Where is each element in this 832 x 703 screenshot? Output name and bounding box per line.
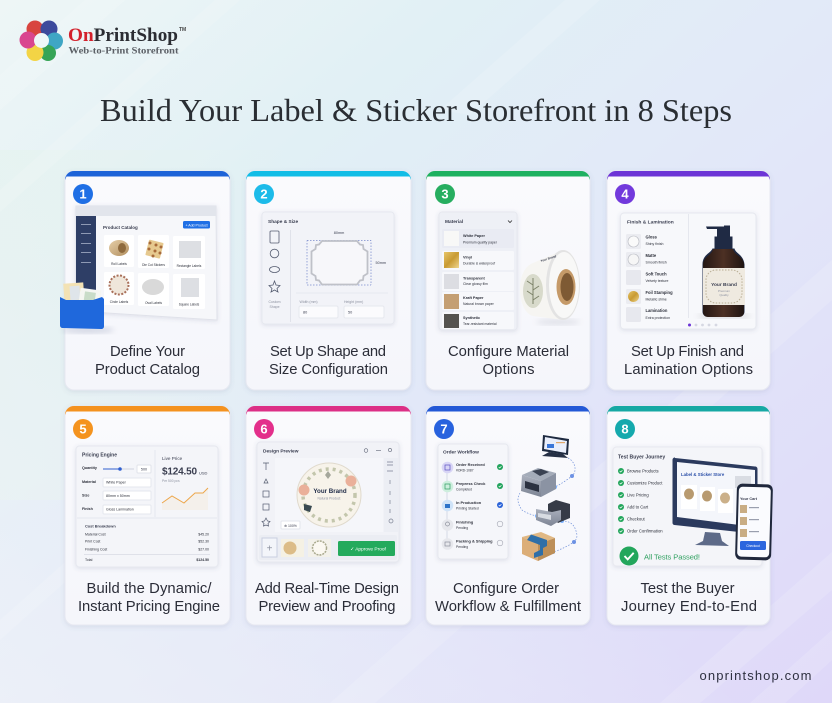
product tiles [104, 235, 205, 309]
finish panel: Metallic shine [646, 298, 667, 302]
card background [607, 406, 770, 625]
card accent bar [426, 171, 590, 180]
finish panel: Matte [646, 253, 657, 258]
step number badge: 4 [621, 186, 629, 202]
caption [435, 581, 581, 615]
blue folder icon [60, 282, 114, 334]
material list: Durable & waterproof [463, 262, 495, 266]
pricing form: Size [82, 494, 89, 498]
logo tagline: Web-to-Print Storefront [68, 46, 179, 56]
caption [269, 344, 388, 378]
buyer journey panel: Test Buyer Journey [618, 454, 665, 460]
product tiles: Roll Labels [111, 262, 127, 266]
shape and size panel [262, 212, 394, 324]
cost breakdown [84, 524, 210, 562]
catalog browser window [76, 206, 217, 320]
checklist: Customize Product [627, 480, 663, 486]
pump bottle: Quality [719, 293, 729, 297]
step number badge [435, 184, 455, 204]
step number badge [254, 419, 274, 439]
caption [255, 581, 399, 615]
pricing form: Material [82, 480, 96, 484]
finish panel: Gloss [646, 234, 658, 240]
card accent bar [607, 171, 770, 180]
label outline with dimensions: 80mm [334, 231, 344, 235]
fulfillment devices flow [518, 435, 577, 561]
order workflow panel: #ORD-1087 [456, 468, 474, 472]
live price: Live Price [162, 456, 183, 461]
live price: Per 500 pcs [162, 479, 180, 483]
shape and size panel: Custom [268, 300, 281, 304]
card accent bar [65, 406, 230, 415]
finish panel: Extra protection [646, 316, 670, 320]
material list: Tear-resistant material [463, 322, 497, 326]
cost breakdown: $45.20 [198, 532, 209, 536]
step number badge [73, 419, 93, 439]
width and height inputs: Height (mm) [344, 300, 363, 304]
panel: step 1 define product catalog [60, 171, 230, 390]
zoom percent [281, 521, 300, 529]
logo wordmark: OnPrintShop [68, 26, 178, 46]
step number badge: 7 [440, 422, 448, 436]
design preview panel [257, 442, 399, 562]
panel: step 6 design preview [246, 406, 411, 625]
material list: Vinyl [463, 256, 472, 260]
pricing form: White Paper [106, 480, 127, 484]
caption [621, 581, 757, 615]
product tiles: Rectangle Labels [177, 264, 202, 268]
order workflow panel: Printing Started [456, 506, 479, 510]
cost breakdown: Total [85, 558, 93, 562]
pump bottle: Your Brand [711, 282, 737, 288]
material list [439, 212, 517, 330]
panel: step 4 finish and lamination [607, 171, 770, 390]
approve proof button [338, 541, 395, 556]
caption: Configure Order [453, 581, 559, 597]
caption [624, 344, 753, 378]
order workflow panel: Packing & Shipping [456, 538, 493, 544]
panel: step 5 pricing engine [65, 406, 230, 625]
caption: Size Configuration [269, 362, 388, 378]
order workflow panel: Order Received [456, 462, 485, 467]
pricing panel [76, 446, 218, 567]
caption: Lamination Options [624, 362, 753, 378]
material list: Kraft Paper [463, 296, 484, 300]
checklist: Order Confirmation [627, 528, 663, 534]
material list: Clear glossy film [463, 282, 488, 286]
step number badge: 2 [260, 186, 268, 202]
round label preview: Your Brand [313, 488, 347, 495]
checklist: Checkout [627, 516, 646, 522]
shape and size panel: Shape [269, 305, 280, 309]
checklist [618, 468, 663, 534]
step number badge: 6 [260, 422, 268, 436]
pump bottle [697, 226, 751, 318]
product tiles: Square Labels [179, 302, 200, 306]
cost breakdown: Material Cost [85, 532, 106, 536]
pump bottle: Premium [718, 289, 730, 293]
status marks [497, 464, 503, 546]
caption: Journey End-to-End [621, 599, 757, 615]
finish panel: Velvety texture [646, 279, 669, 283]
card background [607, 171, 770, 390]
material list: Synthetic [463, 316, 480, 320]
pricing form: Gloss Lamination [106, 508, 134, 512]
label outline with dimensions: 50mm [376, 261, 386, 265]
live price: $124.50 [162, 466, 197, 478]
card accent bar [246, 406, 411, 415]
large printer [521, 468, 556, 497]
card accent bar [607, 406, 770, 415]
cost breakdown: Finishing Cost [85, 548, 107, 552]
website url: onprintshop.com [700, 668, 812, 683]
card background [65, 171, 230, 390]
caption: Configure Material [448, 344, 569, 360]
smartphone [735, 484, 773, 560]
logo flower mark [20, 20, 63, 61]
live price [162, 456, 208, 510]
live price: USD [199, 470, 208, 476]
proof strip: + [267, 544, 273, 554]
shape selector icons [269, 231, 280, 292]
finish panel: Smooth finish [646, 260, 667, 264]
width and height inputs: Width (mm) [300, 300, 318, 304]
checklist: Live Pricing [627, 492, 649, 498]
caption: Options [482, 362, 534, 378]
order workflow panel: Pending [456, 526, 468, 530]
caption: Build the Dynamic/ [86, 581, 212, 597]
material list: Material [445, 219, 463, 225]
order workflow panel: Finishing [456, 520, 474, 524]
cost breakdown: Cost Breakdown [85, 524, 116, 528]
caption: Set Up Finish and [631, 344, 744, 360]
catalog browser window: Product Catalog [103, 225, 138, 230]
order workflow panel: Prepress Check [456, 481, 486, 486]
width and height inputs [299, 300, 384, 318]
buyer journey panel [613, 447, 773, 566]
logo trademark: TM [179, 27, 186, 33]
desktop monitor [672, 458, 758, 546]
step number badge: 8 [621, 422, 629, 436]
caption [448, 344, 569, 378]
tests passed badge: All Tests Passed! [644, 552, 700, 562]
carousel dots [688, 324, 717, 326]
card background [426, 171, 590, 390]
step number badge [73, 184, 93, 204]
desktop monitor: Label & Sticker Store [681, 472, 725, 477]
smartphone: Checkout [746, 544, 760, 548]
panel: step 8 buyer journey [607, 406, 773, 625]
finish panel: Lamination [646, 308, 668, 313]
finish option swatches [626, 234, 641, 322]
card background [65, 406, 230, 625]
step number badge [434, 419, 454, 439]
width and height inputs: 50 [348, 310, 352, 314]
finish panel: Soft Touch [646, 272, 667, 276]
smartphone: Your Cart [740, 497, 758, 501]
step number badge: 1 [79, 186, 87, 202]
step number badge [254, 184, 274, 204]
pricing form: 500 [141, 468, 147, 472]
proof strip [259, 535, 397, 560]
product tiles: Die Cut Stickers [142, 263, 165, 267]
cost breakdown: $52.30 [198, 540, 209, 544]
design preview panel: Design Preview [263, 448, 299, 454]
step number badge [615, 419, 635, 439]
card accent bar [65, 171, 230, 180]
product tiles: Oval Labels [145, 301, 162, 305]
round label preview: Natural Product [318, 496, 341, 500]
pricing form: 80mm x 50mm [106, 494, 130, 498]
order workflow panel: Pending [456, 545, 468, 549]
caption: Preview and Proofing [258, 599, 396, 615]
pricing form [82, 465, 151, 514]
cost breakdown: $27.00 [198, 548, 209, 552]
connector lines [518, 458, 577, 552]
step number badge: 3 [441, 186, 449, 202]
order workflow panel: Completed [456, 488, 472, 492]
caption: Instant Pricing Engine [78, 599, 220, 615]
checklist: Add to Cart [627, 504, 649, 510]
material list: Natural brown paper [463, 302, 495, 306]
step number badge: 5 [79, 422, 87, 436]
panel: step 3 material options [426, 171, 590, 390]
finish panel [620, 213, 756, 329]
order workflow panel [438, 444, 508, 559]
tests passed badge [620, 546, 700, 566]
finish panel: Foil Stamping [646, 290, 673, 295]
pricing form: Quantity [82, 466, 98, 470]
step number badge [615, 184, 635, 204]
round label preview [297, 463, 361, 527]
material list: White Paper [463, 234, 485, 238]
material list: Premium quality paper [463, 240, 498, 244]
cost breakdown: $124.50 [196, 558, 209, 562]
shape and size panel: Shape & Size [268, 219, 298, 225]
title: Build Your Label & Sticker Storefront in 8 Steps [100, 93, 732, 128]
label roll [520, 250, 580, 325]
caption: Add Real-Time Design [255, 581, 399, 597]
caption: Set Up Shape and [270, 344, 386, 360]
material list: Transparent [463, 276, 485, 280]
caption: Workflow & Fulfillment [435, 599, 581, 615]
approve proof button: ✓ Approve Proof [350, 546, 387, 552]
zoom percent: ⊕ 100% [284, 524, 297, 528]
card accent bar [426, 406, 590, 415]
workflow step icons [442, 462, 453, 550]
caption: Test the Buyer [640, 581, 735, 597]
logo [20, 20, 186, 61]
monitor device [542, 435, 569, 458]
width and height inputs: 80 [303, 310, 307, 314]
label outline with dimensions [307, 231, 386, 285]
editor toolbar icons [262, 463, 270, 526]
caption [78, 581, 220, 615]
caption: Product Catalog [95, 362, 200, 378]
finish panel: Shiny finish [646, 242, 663, 246]
card background [246, 171, 411, 390]
shipping box [522, 532, 555, 561]
pricing panel: Pricing Engine [82, 452, 117, 458]
pricing form: Finish [82, 507, 94, 511]
catalog browser window: + Add Product [185, 224, 208, 228]
finish panel: Finish & Lamination [627, 220, 674, 226]
card background [246, 406, 411, 625]
caption [95, 344, 200, 378]
order workflow panel: Order Workflow [443, 450, 479, 456]
caption: Define Your [110, 344, 185, 360]
panel: step 2 shape and size [246, 171, 411, 390]
small printers [536, 500, 570, 526]
panel: step 7 order workflow [426, 406, 590, 625]
product tiles: Circle Labels [110, 300, 129, 304]
cost breakdown: Print Cost [85, 540, 100, 544]
label roll: Your Brand [540, 254, 557, 263]
card background [426, 406, 590, 625]
order workflow panel: In Production [456, 500, 482, 505]
checklist: Browse Products [627, 468, 659, 474]
card accent bar [246, 171, 411, 180]
